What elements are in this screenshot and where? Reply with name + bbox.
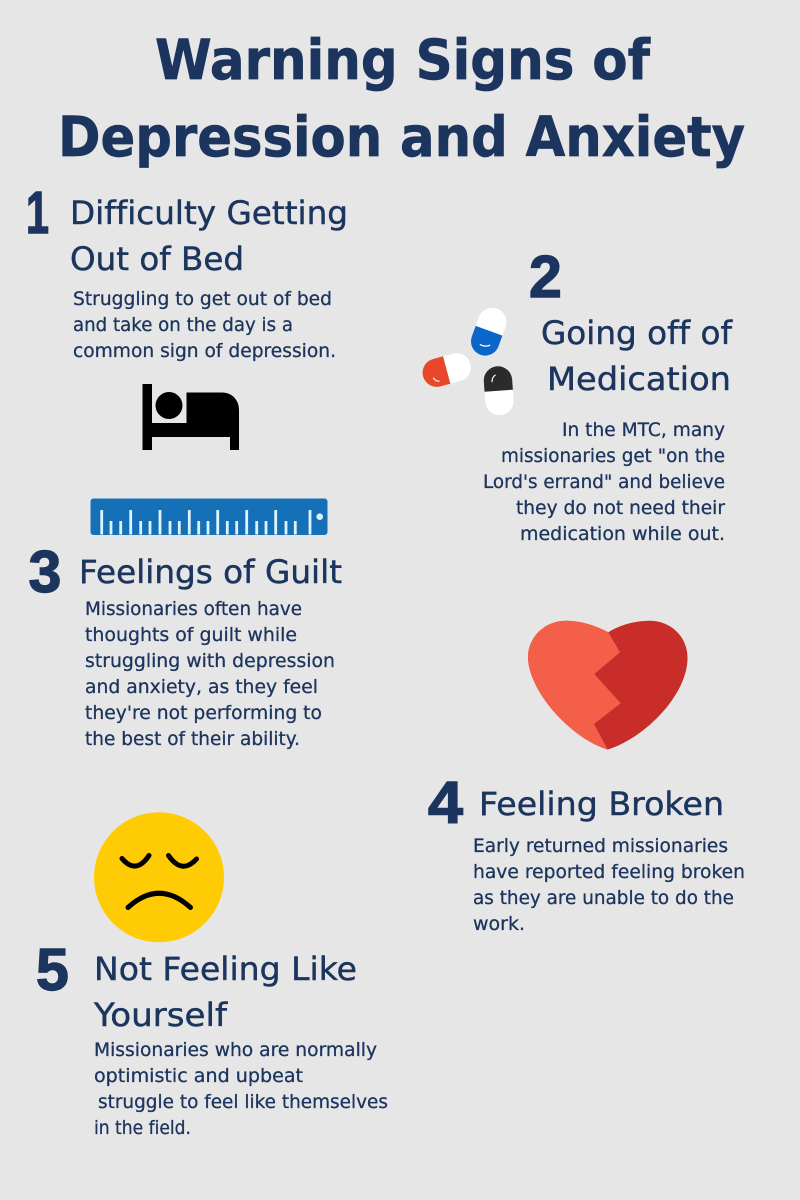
text: sign 4 description (473, 835, 745, 935)
panel: sign 5 not feeling like yourself (36, 937, 388, 1139)
number 3: 3 (28, 539, 61, 605)
text: sign 1 description: and take on the day is a (73, 314, 293, 336)
text: sign 5 description (94, 1039, 388, 1139)
text: sign 3 description (85, 598, 335, 750)
number 1: 1 (26, 180, 49, 246)
heading: going off of medication: Medication (547, 360, 731, 398)
heading: going off of medication: Going off of (541, 314, 733, 352)
text: sign 3 description: and anxiety, as they feel (85, 676, 318, 698)
panel: sign 4 feeling broken (428, 770, 745, 935)
heading: difficulty getting out of bed: Out of Bed (70, 240, 244, 278)
title: Warning Signs of (155, 28, 651, 92)
panel: sign 3 feelings of guilt (28, 539, 342, 750)
text: sign 1 description: common sign of depression. (73, 340, 336, 362)
heading: difficulty getting out of bed (70, 194, 348, 278)
heading: feelings of guilt: Feelings of Guilt (79, 553, 342, 591)
title (58, 28, 745, 169)
text: sign 3 description: thoughts of guilt while (85, 624, 297, 646)
text: sign 3 description: Missionaries often have (85, 598, 302, 620)
number 4: 4 (428, 770, 463, 836)
text: sign 2 description: missionaries get "on the (501, 445, 725, 467)
heading: not feeling like yourself: Yourself (93, 996, 228, 1034)
icon: broken heart (528, 621, 688, 750)
text: sign 2 description: they do not need their (516, 497, 725, 519)
icon: ruler (90, 498, 328, 535)
red pill (419, 350, 474, 390)
text: sign 4 description: Early returned missionaries (473, 835, 728, 857)
text: sign 4 description: work. (473, 913, 525, 935)
title: Depression and Anxiety (58, 105, 745, 169)
panel: sign 2 going off of medication (419, 244, 733, 545)
heading: going off of medication (541, 314, 733, 398)
text: sign 5 description: Missionaries who are normally (94, 1039, 377, 1061)
icon: bed (142, 384, 239, 450)
text: sign 3 description: struggling with depression (85, 650, 335, 672)
text: sign 5 description: optimistic and upbeat (94, 1065, 303, 1087)
text: sign 2 description: medication while out. (520, 523, 725, 545)
text: sign 2 description (483, 419, 725, 545)
heading: feeling broken: Feeling Broken (479, 785, 724, 823)
text: sign 2 description: In the MTC, many (562, 419, 725, 441)
text: sign 5 description: in the field. (94, 1117, 191, 1139)
number 5: 5 (36, 937, 69, 1003)
text: sign 1 description (73, 288, 336, 362)
text: sign 3 description: the best of their ability. (85, 728, 300, 750)
text: sign 3 description: they're not performing to (85, 702, 322, 724)
panel: sign 1 difficulty getting out of bed (26, 180, 348, 450)
text: sign 1 description: Struggling to get out of bed (73, 288, 332, 310)
text: sign 4 description: as they are unable to do the (473, 887, 734, 909)
blue pill (467, 304, 510, 360)
number 2: 2 (529, 244, 562, 310)
icon: pills (419, 304, 515, 416)
icon: sad face (94, 812, 224, 942)
heading: not feeling like yourself: Not Feeling Like (94, 950, 357, 988)
black pill (483, 365, 515, 416)
text: sign 2 description: Lord's errand" and believe (483, 471, 725, 493)
text: sign 5 description: struggle to feel like themselves (98, 1091, 388, 1113)
text: sign 4 description: have reported feeling broken (473, 861, 745, 883)
heading: difficulty getting out of bed: Difficulty Getting (70, 194, 348, 232)
heading: not feeling like yourself (93, 950, 357, 1034)
